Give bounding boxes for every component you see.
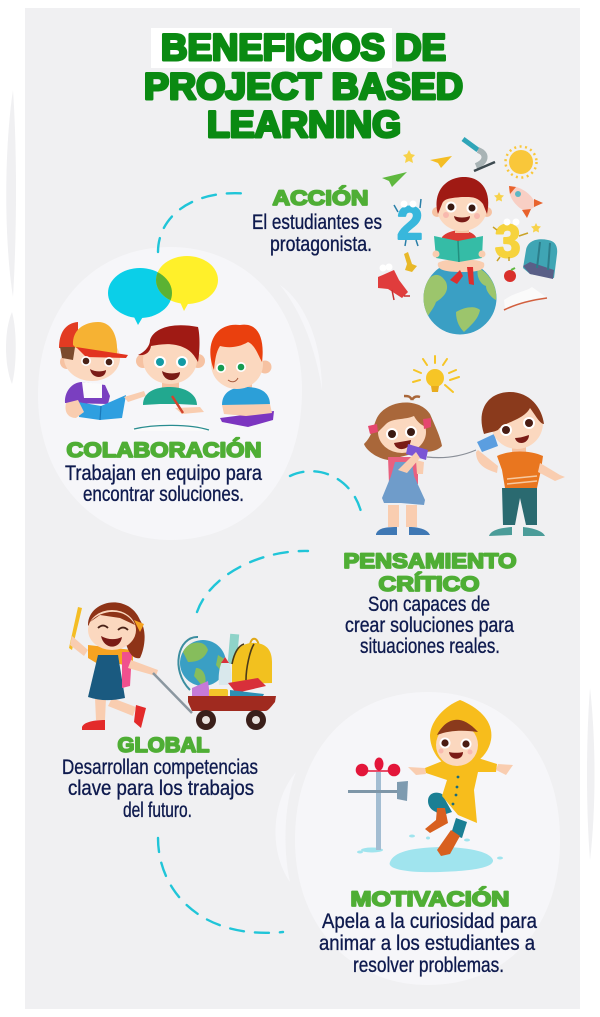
puddle	[357, 834, 503, 872]
text: motivación description	[319, 910, 537, 977]
girl with pencil	[69, 602, 158, 730]
illustration: children with tin can phone	[364, 356, 565, 536]
title: LEARNING	[207, 104, 401, 145]
boy with cap	[59, 322, 146, 420]
dashed connector: global to motivación	[158, 838, 283, 933]
icon: open book	[504, 287, 547, 310]
speech bubbles	[108, 256, 218, 325]
text: pensamiento crítico description	[345, 593, 514, 658]
icon: green paper plane	[382, 172, 407, 187]
boy torso, legs and shoes	[432, 230, 486, 285]
text: global description	[62, 756, 258, 822]
hood and face	[430, 700, 491, 768]
icon: red creature	[378, 264, 410, 300]
string	[427, 450, 476, 458]
heading: motivación: MOTIVACIÓN	[350, 886, 510, 911]
title: BENEFICIOS DE	[161, 27, 446, 68]
heading: pensamiento crítico	[344, 549, 516, 596]
boy with purple book	[210, 325, 274, 427]
rocket toy	[219, 657, 231, 685]
text: global description: del futuro.	[123, 799, 192, 822]
text: colaboración description: Trabajan en equipo para	[65, 462, 262, 485]
dashed connector: colaboración to pensamiento	[290, 471, 362, 516]
text: acción description: El estudiantes es	[252, 211, 382, 234]
dashed connector: pensamiento to global	[197, 551, 308, 612]
icon: backpack	[523, 239, 557, 279]
wagon handle	[153, 673, 192, 713]
wagon body and wheels	[188, 696, 276, 730]
icon: sun	[506, 146, 536, 178]
heading: acción: ACCIÓN	[272, 185, 368, 210]
icon: apple	[504, 268, 516, 282]
backpack	[232, 639, 272, 684]
icon: number three creature: 3	[495, 215, 521, 267]
text: pensamiento crítico description: Son capaces de	[368, 593, 490, 616]
icon: flask	[404, 252, 417, 272]
heading: pensamiento crítico: PENSAMIENTO	[344, 549, 516, 573]
icon: light bulb	[413, 356, 459, 392]
text: motivación description: resolver problemas.	[353, 954, 504, 977]
title: PROJECT BASED	[144, 66, 463, 107]
heading: global: GLOBAL	[118, 733, 210, 757]
heading: colaboración: COLABORACIÓN	[66, 437, 262, 462]
icon: yellow paper plane	[430, 156, 452, 168]
illustration: boy on globe with science icons	[378, 139, 557, 334]
ruler	[228, 634, 239, 664]
text: pensamiento crítico description: situaciones reales.	[360, 635, 500, 658]
books and blocks	[192, 678, 266, 698]
dashed connector: colaboración to acción	[158, 193, 250, 252]
text: colaboración description: encontrar soluciones.	[83, 483, 244, 506]
icon: number two creature: 2	[397, 197, 423, 249]
legs and boots	[425, 793, 467, 856]
girl	[364, 396, 442, 535]
crescent decorations	[276, 285, 322, 882]
illustration: girl pulling wagon	[69, 602, 276, 730]
icon: rocket	[509, 186, 543, 218]
illustration: child in raincoat with anemometer	[348, 700, 513, 872]
text: motivación description: animar a los estudiantes a	[319, 932, 535, 955]
boy head	[432, 177, 492, 233]
globe with stand	[178, 637, 226, 690]
text: acción description	[252, 211, 382, 256]
boy with pencil	[133, 325, 210, 431]
circle panel: motivación	[295, 692, 560, 985]
icon: microscope	[463, 139, 495, 171]
text: motivación description: Apela a la curiosidad para	[322, 910, 537, 933]
text: global description: clave para los trabajos	[68, 777, 254, 800]
circle panel: colaboración	[38, 247, 302, 540]
icon: stars	[494, 192, 541, 232]
title	[144, 27, 463, 145]
text: colaboración description	[65, 462, 262, 506]
side decorations	[6, 90, 594, 860]
text: acción description: protagonista.	[270, 233, 372, 256]
text: global description: Desarrollan competencias	[62, 756, 258, 779]
heading: pensamiento crítico: CRÍTICO	[378, 571, 480, 596]
text: pensamiento crítico description: crear soluciones para	[345, 614, 514, 637]
icon: star	[403, 150, 415, 163]
icon: globe	[424, 268, 496, 334]
boy	[476, 392, 565, 536]
anemometer	[348, 758, 408, 850]
raincoat	[408, 758, 513, 823]
illustration: three boys with speech bubbles	[59, 256, 274, 431]
